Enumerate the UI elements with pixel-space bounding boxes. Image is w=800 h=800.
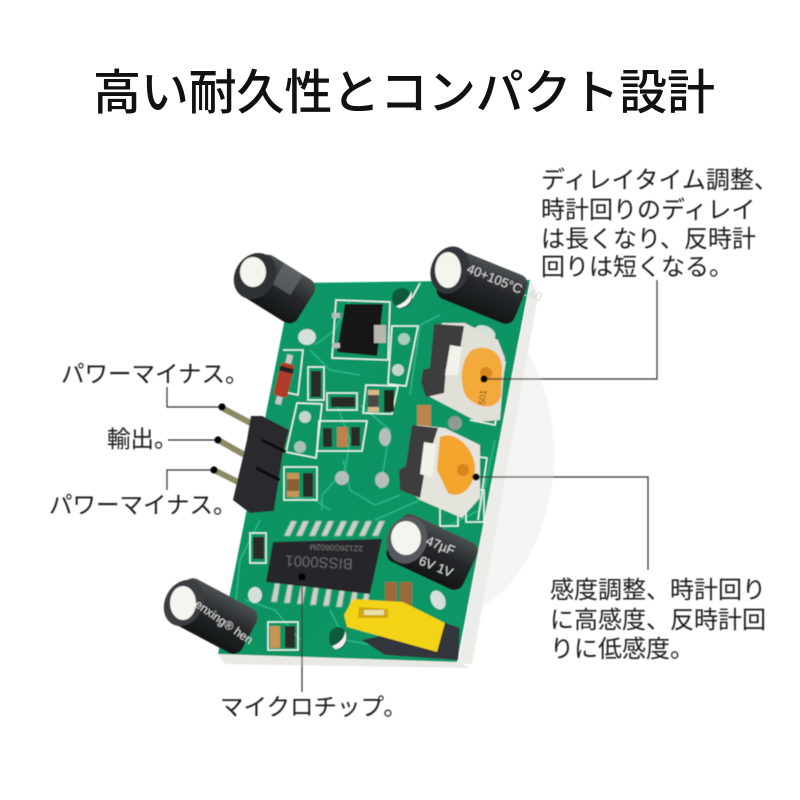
callout line: power minus (top) [167, 387, 226, 411]
microchip: 2Z126G0602M [309, 542, 363, 553]
label: output: 輸出。 [107, 426, 178, 452]
label: power minus (top): パワーマイナス。 [61, 361, 249, 387]
label: sensitivity adjustment: 感度調整、時計回り [550, 577, 766, 604]
potentiometer: delay time [421, 323, 505, 422]
electrolytic capacitor: bottom left [156, 573, 261, 657]
small SMD parts [253, 371, 431, 648]
PIR sensor module photo [49, 167, 778, 720]
electrolytic capacitor: lower middle: 47µF [424, 533, 457, 558]
potentiometer: delay time: 501 [477, 389, 488, 405]
microchip [266, 539, 382, 594]
electrolytic capacitor: lower middle [380, 511, 481, 593]
label: microchip: マイクロチップ。 [220, 694, 407, 720]
callout line: delay time [480, 280, 657, 383]
oval pads [248, 322, 498, 612]
microchip: BISS0001 [285, 551, 353, 572]
diode [271, 353, 297, 406]
callout line: output [168, 436, 222, 444]
callout line: sensitivity [472, 473, 648, 570]
yellow jumper [344, 599, 460, 660]
silkscreen outlines [250, 283, 505, 650]
header housing [233, 416, 289, 513]
green circuit board [218, 280, 530, 662]
label: sensitivity adjustment: りに低感度。 [550, 636, 694, 663]
header pins [216, 409, 262, 485]
electrolytic capacitor: top right [424, 241, 545, 327]
callout line: power minus (bottom) [167, 466, 218, 490]
solder joints [294, 333, 462, 488]
electrolytic capacitor: lower middle: 6V 1V [417, 553, 456, 580]
title: 高い耐久性とコンパクト設計 [93, 67, 715, 120]
label: delay time adjustment: は長くなり、反時計 [541, 226, 756, 253]
sensor dome behind the board [218, 280, 554, 668]
pin header [216, 409, 289, 513]
microchip pins [271, 521, 385, 609]
voltage regulator chip [332, 304, 386, 356]
electrolytic capacitor: top left [225, 245, 319, 327]
potentiometer: sensitivity [399, 425, 480, 518]
label: sensitivity adjustment [550, 577, 766, 663]
callout line: microchip [298, 573, 306, 692]
electrolytic capacitor: bottom left: enxing® hen [192, 597, 256, 647]
label: delay time adjustment: 時計回りのディレイ [541, 197, 755, 224]
label: power minus (bottom): パワーマイナス。 [49, 492, 237, 518]
mounting holes [329, 288, 412, 649]
electrolytic capacitor: top right: 40+105°C .40 [465, 261, 545, 305]
label: delay time adjustment: ディレイタイム調整、 [541, 167, 778, 194]
label: sensitivity adjustment: に高感度、反時計回 [550, 607, 766, 634]
label: delay time adjustment [541, 167, 778, 281]
label: delay time adjustment: 回りは短くなる。 [541, 254, 733, 281]
